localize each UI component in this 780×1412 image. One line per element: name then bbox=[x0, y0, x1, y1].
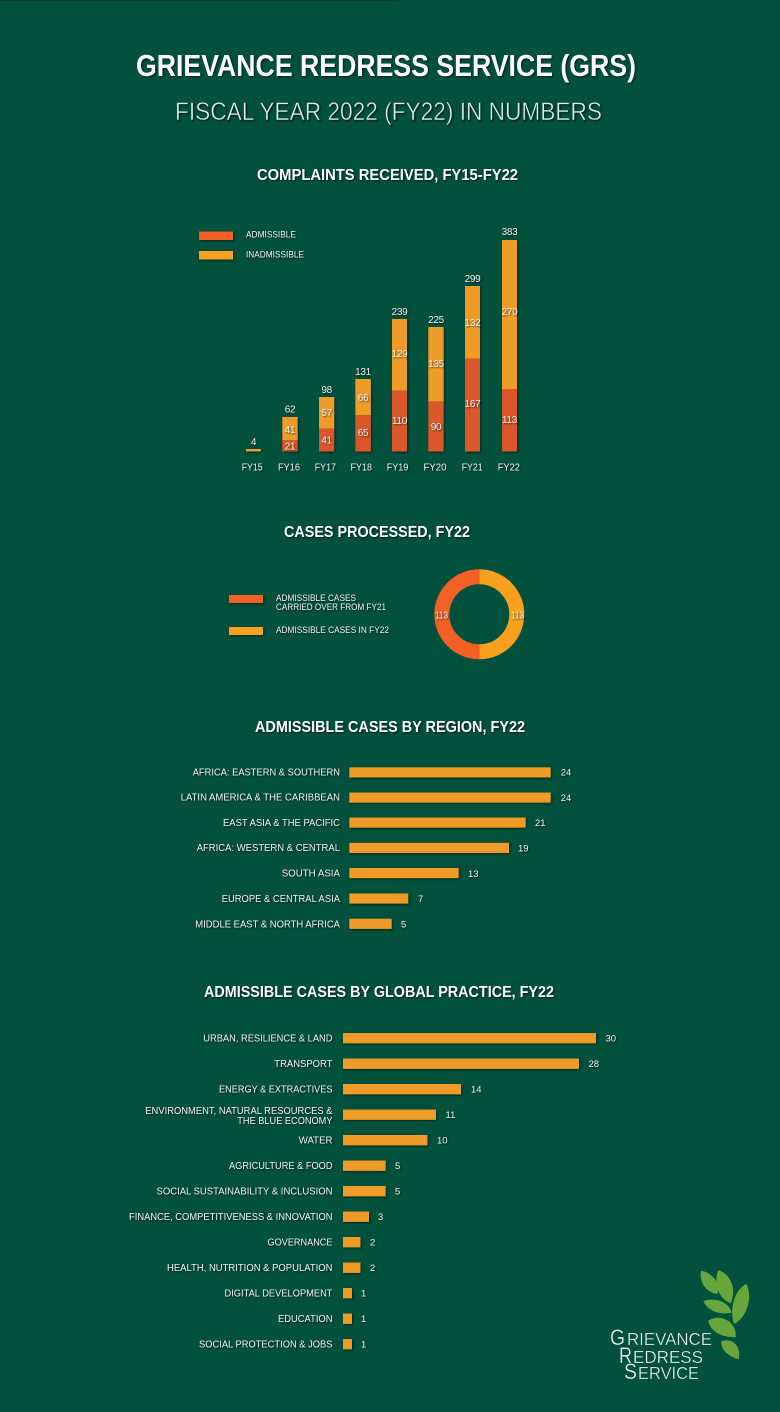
panel: complaints stacked bar chart bbox=[199, 227, 520, 474]
region values: 5 bbox=[401, 920, 406, 930]
title: GRIEVANCE REDRESS SERVICE (GRS) bbox=[136, 48, 636, 83]
logo wordmark: R bbox=[619, 1343, 632, 1368]
practice labels: HEALTH, NUTRITION & POPULATION bbox=[167, 1263, 332, 1274]
icon: green leaves bbox=[701, 1270, 749, 1359]
practice values: 2 bbox=[370, 1263, 375, 1274]
practice values: 28 bbox=[588, 1059, 599, 1070]
practice labels: WATER bbox=[299, 1136, 332, 1146]
region labels: AFRICA: EASTERN & SOUTHERN bbox=[193, 768, 340, 778]
region labels: MIDDLE EAST & NORTH AFRICA bbox=[195, 919, 340, 930]
axis labels: FY18 bbox=[350, 462, 372, 474]
axis labels: FY17 bbox=[315, 462, 336, 474]
donut chart: 113 bbox=[511, 610, 524, 622]
practice values: 30 bbox=[606, 1034, 616, 1044]
practice values: 11 bbox=[446, 1110, 455, 1121]
region values: 19 bbox=[518, 844, 529, 854]
legend: cases processed: ADMISSIBLE CASES bbox=[276, 593, 356, 603]
region values: 13 bbox=[468, 869, 479, 880]
logo wordmark: EDRESS bbox=[633, 1347, 703, 1367]
panel: region bar chart bbox=[181, 767, 571, 930]
logo: Grievance Redress Service bbox=[610, 1270, 749, 1384]
practice labels: ENERGY & EXTRACTIVES bbox=[219, 1084, 333, 1096]
bar totals: 62 bbox=[285, 404, 296, 416]
practice values: 10 bbox=[437, 1136, 448, 1146]
segment values: 41 bbox=[321, 436, 333, 446]
axis labels: FY20 bbox=[424, 462, 447, 474]
region labels: LATIN AMERICA & THE CARIBBEAN bbox=[181, 792, 340, 804]
practice values bbox=[361, 1034, 616, 1350]
practice values: 5 bbox=[395, 1161, 400, 1172]
bar totals: 131 bbox=[355, 367, 372, 378]
logo wordmark: RIEVANCE bbox=[627, 1329, 712, 1349]
panel: cases processed donut bbox=[229, 577, 524, 652]
heading: admissible cases by region: ADMISSIBLE CASES BY REGION, FY22 bbox=[255, 719, 525, 736]
bars: FY15 to FY22 bbox=[246, 240, 517, 452]
segment values: 270 bbox=[502, 307, 518, 318]
segment values: 129 bbox=[392, 349, 408, 360]
practice labels: ENVIRONMENT, NATURAL RESOURCES & bbox=[145, 1106, 333, 1117]
segment values: 90 bbox=[431, 422, 442, 433]
axis labels: FY22 bbox=[498, 462, 520, 474]
bar totals: 225 bbox=[428, 315, 445, 326]
practice labels: TRANSPORT bbox=[274, 1059, 332, 1070]
practice labels: THE BLUE ECONOMY bbox=[237, 1116, 333, 1127]
practice labels: DIGITAL DEVELOPMENT bbox=[224, 1288, 332, 1300]
region bars bbox=[349, 767, 551, 929]
region values: 21 bbox=[535, 818, 546, 829]
region values: 24 bbox=[561, 793, 571, 804]
bar totals: 98 bbox=[321, 385, 333, 396]
region labels: AFRICA: WESTERN & CENTRAL bbox=[197, 843, 340, 854]
legend: admissible / inadmissible: ADMISSIBLE bbox=[246, 230, 296, 240]
logo wordmark: S bbox=[624, 1359, 637, 1384]
practice values: 1 bbox=[361, 1288, 366, 1300]
practice labels: EDUCATION bbox=[278, 1314, 332, 1325]
bar totals: 239 bbox=[392, 307, 408, 318]
heading: complaints received: COMPLAINTS RECEIVED, FY15-FY22 bbox=[257, 167, 518, 184]
logo wordmark bbox=[610, 1325, 712, 1384]
axis labels: FY21 bbox=[462, 462, 483, 474]
segment values: 135 bbox=[428, 359, 445, 370]
axis labels bbox=[242, 462, 520, 474]
practice bars bbox=[343, 1033, 596, 1349]
donut chart: 113 bbox=[435, 610, 448, 622]
axis labels: FY19 bbox=[387, 462, 409, 474]
region values: 7 bbox=[418, 894, 423, 905]
axis labels: FY15 bbox=[242, 462, 263, 474]
segment values: 66 bbox=[358, 393, 369, 404]
practice values: 1 bbox=[361, 1314, 366, 1325]
region labels: EAST ASIA & THE PACIFIC bbox=[223, 818, 340, 829]
legend: cases processed: ADMISSIBLE CASES IN FY22 bbox=[276, 625, 389, 635]
segment values: 21 bbox=[285, 442, 296, 452]
donut chart bbox=[435, 577, 524, 652]
segment values: 167 bbox=[465, 399, 481, 410]
practice values: 2 bbox=[370, 1238, 375, 1248]
practice values: 5 bbox=[395, 1186, 400, 1198]
panel: global practice bar chart bbox=[129, 1033, 616, 1350]
practice labels: AGRICULTURE & FOOD bbox=[229, 1161, 332, 1172]
practice values: 3 bbox=[378, 1212, 383, 1223]
heading: cases processed: CASES PROCESSED, FY22 bbox=[284, 524, 470, 541]
legend: admissible / inadmissible bbox=[199, 230, 304, 260]
practice labels bbox=[129, 1034, 333, 1350]
region labels bbox=[181, 768, 340, 930]
segment values: 65 bbox=[358, 428, 369, 439]
logo wordmark: G bbox=[610, 1325, 625, 1350]
segment values bbox=[285, 307, 518, 452]
heading: admissible cases by global practice: ADMISSIBLE CASES BY GLOBAL PRACTICE, FY22 bbox=[204, 984, 554, 1001]
practice labels: SOCIAL SUSTAINABILITY & INCLUSION bbox=[156, 1186, 332, 1198]
segment values: 110 bbox=[392, 416, 408, 427]
practice values: 1 bbox=[361, 1340, 366, 1350]
bar totals bbox=[251, 227, 518, 448]
logo wordmark: ERVICE bbox=[638, 1363, 699, 1383]
legend: admissible / inadmissible: INADMISSIBLE bbox=[246, 250, 304, 260]
segment values: 57 bbox=[321, 408, 333, 419]
region values bbox=[401, 768, 571, 930]
region values: 24 bbox=[561, 768, 571, 778]
subtitle: FISCAL YEAR 2022 (FY22) IN NUMBERS bbox=[175, 98, 602, 126]
legend: cases processed: CARRIED OVER FROM FY21 bbox=[276, 602, 386, 612]
segment values: 132 bbox=[465, 318, 481, 329]
bar totals: 4 bbox=[251, 437, 257, 448]
axis labels: FY16 bbox=[278, 462, 300, 474]
bar totals: 299 bbox=[465, 274, 481, 285]
practice labels: SOCIAL PROTECTION & JOBS bbox=[199, 1340, 333, 1350]
segment values: 41 bbox=[285, 425, 296, 436]
practice labels: GOVERNANCE bbox=[268, 1238, 333, 1248]
bar totals: 383 bbox=[502, 227, 518, 238]
region labels: EUROPE & CENTRAL ASIA bbox=[222, 894, 340, 905]
segment values: 113 bbox=[502, 415, 518, 426]
practice labels: FINANCE, COMPETITIVENESS & INNOVATION bbox=[129, 1212, 332, 1223]
legend: cases processed bbox=[229, 593, 389, 635]
practice values: 14 bbox=[471, 1084, 482, 1096]
practice labels: URBAN, RESILIENCE & LAND bbox=[203, 1034, 332, 1044]
region labels: SOUTH ASIA bbox=[282, 868, 340, 880]
